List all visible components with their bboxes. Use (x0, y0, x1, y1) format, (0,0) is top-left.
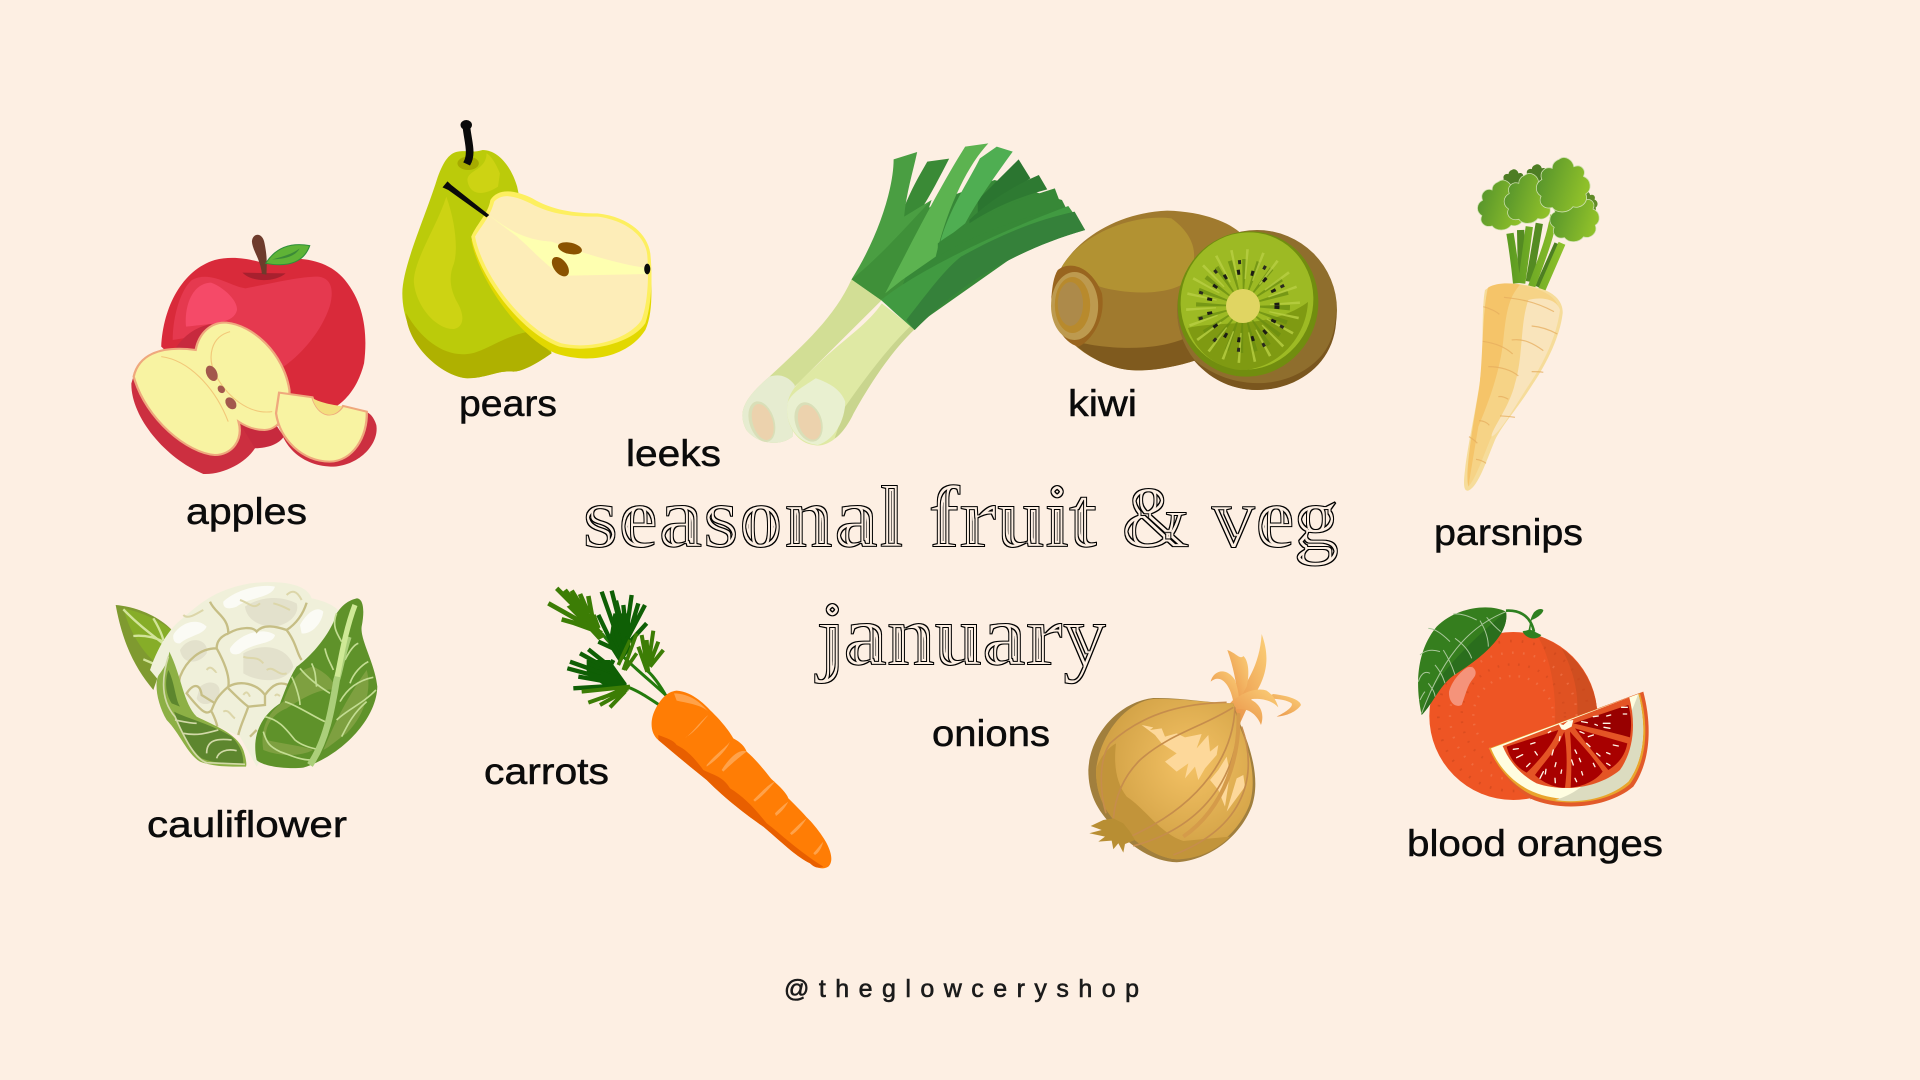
leek stalks (742, 279, 915, 446)
carrot tops (548, 588, 667, 707)
onion root (1089, 818, 1135, 853)
front right leaf (255, 598, 377, 768)
illustration: pears (402, 120, 652, 378)
illustration: parsnip (1464, 158, 1599, 491)
title: seasonal fruit & veg: veg (1211, 469, 1338, 567)
label: pears: pears (459, 383, 557, 424)
title: seasonal fruit & veg: fruit (930, 469, 1117, 567)
leek leaves (852, 143, 1085, 330)
orange slice (1489, 692, 1649, 806)
label: onions: onions (932, 713, 1050, 754)
cut apple half (131, 323, 289, 474)
parsnip root (1464, 283, 1563, 491)
parsnip leaves (1478, 158, 1599, 242)
title: seasonal fruit & veg: & (1119, 469, 1215, 567)
illustration: onion (1088, 634, 1301, 862)
back leaf (116, 605, 173, 690)
label: cauliflower: cauliflower (147, 804, 347, 845)
orange leaf (1418, 607, 1506, 715)
footer handle: @theglowceryshop (784, 975, 1139, 1003)
whole pear (402, 120, 552, 378)
onion tips (1211, 634, 1301, 725)
label: blood oranges: blood oranges (1407, 823, 1663, 864)
whole apple (161, 235, 365, 433)
parsnip stems (1510, 215, 1562, 290)
illustration: apples (131, 235, 377, 474)
label: kiwi: kiwi (1068, 383, 1137, 424)
apple wedge (276, 393, 377, 467)
whole kiwi (1051, 211, 1241, 370)
cut kiwi half (1157, 211, 1339, 397)
cauliflower head (150, 582, 340, 767)
onion bulb (1088, 698, 1255, 862)
cut pear half (443, 181, 652, 358)
label: leeks: leeks (626, 433, 721, 474)
illustration: blood orange (1418, 607, 1649, 806)
front left leaf (157, 652, 246, 767)
title: seasonal fruit & veg: seasonal (583, 469, 927, 567)
illustration: kiwi (1051, 211, 1339, 397)
title: january: january (814, 587, 1107, 685)
illustration: cauliflower (116, 582, 377, 768)
label: apples: apples (186, 491, 307, 532)
illustration: carrot (548, 588, 831, 868)
carrot root (652, 691, 831, 868)
illustration: leeks (742, 143, 1085, 446)
whole orange (1429, 609, 1597, 800)
label: carrots: carrots (484, 751, 609, 792)
label: parsnips: parsnips (1434, 512, 1583, 553)
